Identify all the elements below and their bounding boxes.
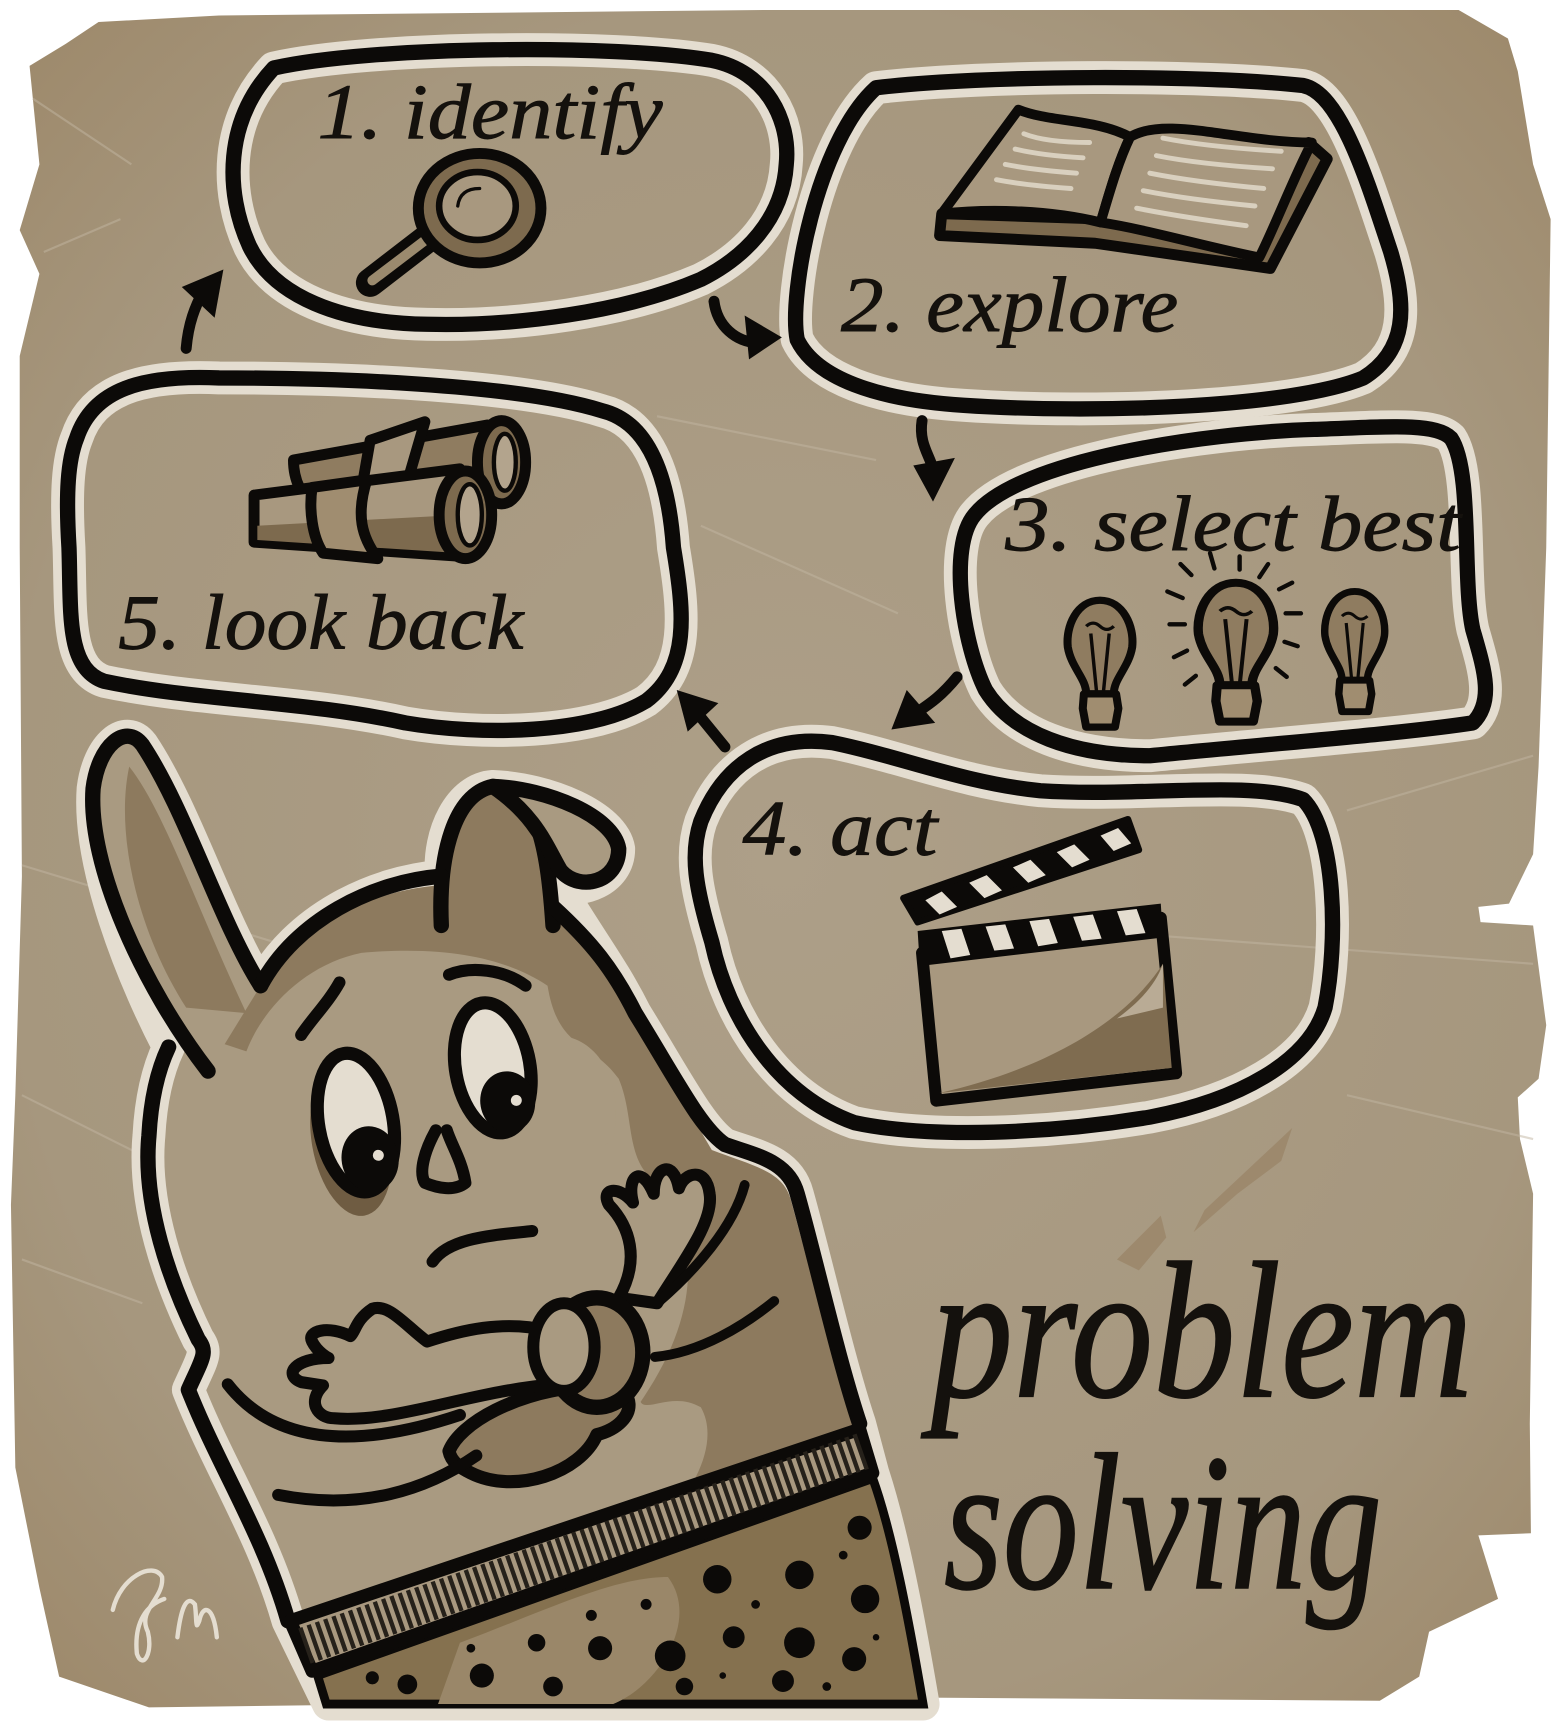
label: 5. look back: 5. look back [118,579,526,666]
arrow: select best to act [891,677,957,729]
paper creases [22,99,1533,1303]
left ear [93,736,261,1071]
bubble 4: act [695,741,1333,1132]
label: 3. select best: 3. select best [1004,481,1463,568]
right hand [607,1169,710,1303]
right eye [445,997,541,1140]
left eye [297,1047,409,1222]
label: 1. identify: 1. identify [318,69,664,156]
bubble 2: explore [796,78,1401,409]
arrow: explore to select best [913,421,955,502]
lower rope loops [449,1385,629,1482]
rope knot [533,1298,643,1407]
arrow: act to look back [677,690,725,747]
left ear inner shade [125,767,246,1013]
hugging arm curves [228,1384,476,1500]
right ear [441,786,553,925]
right arm lines [655,1185,774,1357]
signature [113,1571,217,1660]
arrow: look back to identify [182,270,223,348]
trousers light patch [438,1577,679,1704]
trouser dots [366,1516,879,1696]
head shading [214,885,854,1566]
label: 4. act: 4. act [742,785,940,872]
body outline [148,876,860,1621]
icon: binoculars [254,421,526,559]
character halo and base fill [93,736,923,1704]
polka dot trousers [318,1478,923,1704]
left hand and arm [293,1308,555,1419]
brows, nose and mouth [301,970,532,1262]
bubble 5: look back [68,377,681,730]
title line: solving: solving [944,1415,1382,1631]
paper stain [1117,1128,1292,1270]
label: 2. explore: 2. explore [841,262,1178,349]
hem ribbing [304,1451,863,1646]
sweater hem [290,1429,873,1671]
right ear flop [493,786,619,882]
character: worried rabbit [93,736,923,1704]
light face patch [553,1035,616,1146]
icon: three light bulbs [1068,553,1385,727]
bubble 3: select best [960,427,1486,756]
icon: open book [940,110,1327,268]
title line: problem: problem [921,1223,1473,1439]
bubble 1: identify [233,50,787,324]
title [921,1223,1473,1631]
icon: magnifying glass [370,153,541,283]
arrow: identify to explore [714,301,782,359]
icon: film clapperboard [903,819,1176,1101]
